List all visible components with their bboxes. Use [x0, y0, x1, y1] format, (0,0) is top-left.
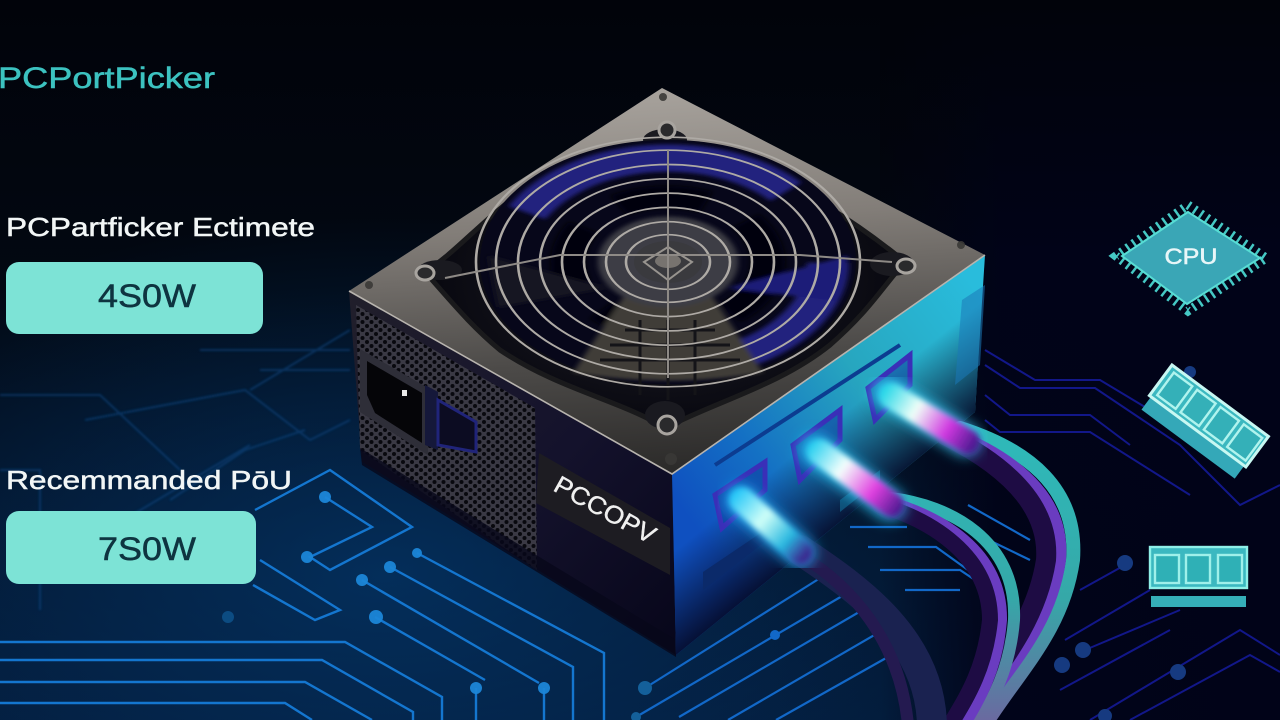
brand title: PCPortPicker: [0, 62, 215, 95]
faint upper-left circuit traces: [0, 330, 350, 610]
fan hub: [634, 241, 702, 283]
estimate value pill: 4S0W: [98, 278, 197, 314]
power socket: [360, 349, 438, 455]
icon: CPU: CPU: [1164, 244, 1218, 269]
top face: [349, 88, 985, 474]
screw mounting ears: [418, 129, 914, 429]
icon: RAM module: [1140, 365, 1268, 480]
connector ports: [715, 355, 910, 528]
right background shading: [880, 0, 1280, 720]
power cables: [740, 393, 1073, 720]
cable glow halos: [740, 393, 965, 552]
power switch: [438, 400, 476, 452]
circuit traces: lower right: [636, 505, 1030, 720]
circuit pads: right, dim: [631, 366, 1196, 720]
screws: [416, 122, 915, 434]
cable 1: [800, 550, 932, 720]
recommended value pill: 7S0W: [98, 531, 197, 567]
circuit traces: right, dim: [985, 350, 1280, 720]
icon: CPU: [1116, 205, 1266, 311]
cable glow cores: [742, 396, 968, 552]
recommended label: Recemmanded PōU: [6, 465, 292, 495]
estimate value pill: [6, 262, 263, 334]
circuit traces: lower left: [0, 470, 604, 720]
fan blades: [449, 120, 887, 404]
label plate: PCCOPV: [549, 471, 661, 550]
power supply unit: [349, 88, 985, 657]
label plate: [536, 453, 670, 575]
grill struts: [445, 150, 892, 378]
fan grill rings: [476, 137, 860, 387]
right face: [672, 255, 985, 655]
icon: memory bank: [1150, 547, 1247, 607]
cable 2: [880, 498, 1014, 720]
fan cutout: [425, 128, 905, 428]
estimate label: PCPartficker Ectimete: [6, 212, 315, 242]
lower fan grid: [600, 320, 740, 400]
left face: [349, 291, 676, 657]
cable 3: [945, 428, 1073, 720]
circuit pads: lower left: [222, 491, 550, 694]
recommended value pill: [6, 511, 256, 584]
ventilation mesh: [356, 305, 537, 570]
